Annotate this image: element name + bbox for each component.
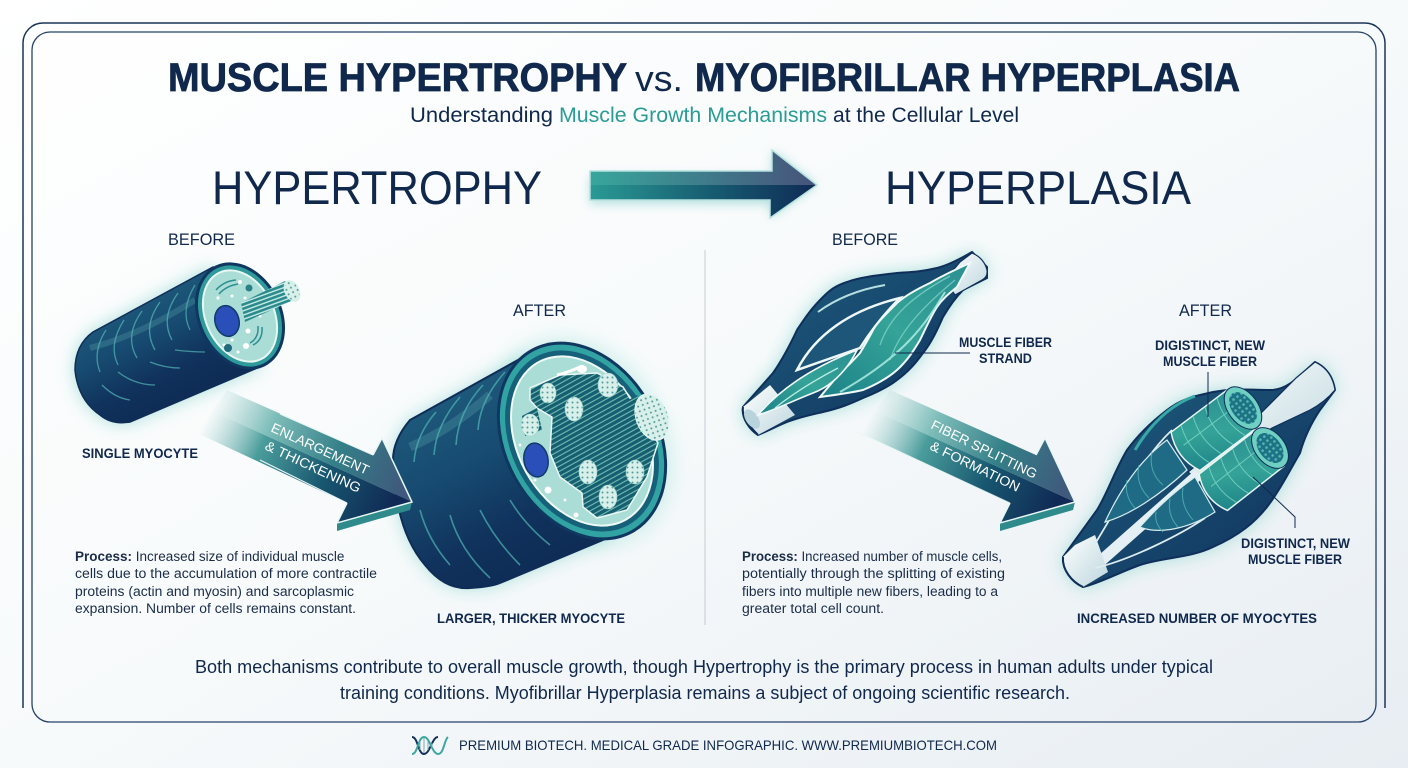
label: before right: BEFORE (832, 230, 898, 249)
label: new fiber lower: DIGISTINCT, NEW (1241, 535, 1351, 551)
tendon strip (1082, 470, 1203, 578)
tendon top (1188, 362, 1335, 478)
fiber 1 (1166, 380, 1269, 474)
title: MYOFIBRILLAR HYPERPLASIA (695, 56, 1240, 100)
label: larger thicker myocyte: LARGER, THICKER MYOCYTE (437, 610, 625, 626)
title: MUSCLE HYPERTROPHY (168, 56, 627, 100)
label: muscle fiber strand: STRAND (979, 350, 1032, 366)
illustration: larger thicker myocyte (393, 304, 709, 588)
subtitle: at the Cellular Level (833, 104, 1019, 127)
highlight (818, 285, 885, 312)
title (168, 56, 1240, 100)
arrow: hypertrophy to hyperplasia (590, 150, 817, 218)
text: hypertrophy process: expansion. Number of cells remains constant. (75, 601, 356, 616)
heading: hyperplasia: HYPERPLASIA (885, 161, 1192, 214)
arrow: enlargement and thickening: & THICKENING (263, 438, 363, 496)
leader (895, 352, 970, 354)
label: muscle fiber strand: MUSCLE FIBER (959, 334, 1052, 350)
fiber 1 dark part (1105, 440, 1187, 522)
label: increased number of myocytes: INCREASED NUMBER OF MYOCYTES (1077, 610, 1317, 626)
heading: hypertrophy: HYPERTROPHY (212, 161, 542, 214)
nucleus (211, 303, 243, 339)
leaders (1207, 372, 1209, 417)
tendon bottom (1063, 535, 1108, 587)
conclusion text: Both mechanisms contribute to overall muscle growth, though Hypertrophy is the primary process in human adults under typical (195, 657, 1213, 677)
subtitle: Understanding (410, 104, 553, 127)
label: after left: AFTER (513, 301, 566, 320)
illustration: muscle after (1063, 362, 1335, 587)
arrow: fiber splitting and formation (855, 390, 1075, 531)
label: new fiber lower (1241, 535, 1351, 567)
nucleus (521, 441, 551, 479)
tendons (945, 253, 987, 295)
text: hyperplasia process (742, 549, 1005, 616)
divider (704, 250, 706, 625)
text: hyperplasia process: fibers into multiple new fibers, leading to a (742, 584, 998, 599)
subtitle (410, 104, 1019, 127)
icon: dna (412, 737, 448, 754)
illustration: single myocyte (75, 247, 303, 423)
label: new fiber lower: MUSCLE FIBER (1248, 551, 1342, 567)
arrow: fiber splitting and formation: & FORMATION (928, 438, 1022, 495)
bundle cavity (530, 373, 658, 518)
text: hyperplasia process: Process: Increased number of muscle cells, (742, 549, 1002, 564)
arrow: enlargement and thickening: ENLARGEMENT (269, 420, 371, 478)
small strand (758, 350, 857, 415)
conclusion text: training conditions. Myofibrillar Hyperplasia remains a subject of ongoing scientific research. (340, 683, 1070, 703)
fiber 2 (1194, 421, 1296, 514)
label: new fiber upper: MUSCLE FIBER (1163, 353, 1257, 369)
text: hypertrophy process: Process: Increased size of individual muscle (75, 549, 344, 564)
text: hyperplasia process: greater total cell count. (742, 601, 884, 616)
text: hypertrophy process (75, 549, 377, 616)
footer text: PREMIUM BIOTECH. MEDICAL GRADE INFOGRAPHIC. WWW.PREMIUMBIOTECH.COM (459, 737, 997, 753)
label: single myocyte: SINGLE MYOCYTE (82, 445, 198, 461)
text: hypertrophy process: proteins (actin and myosin) and sarcoplasmic (75, 584, 354, 599)
illustration: muscle before (741, 252, 987, 435)
fiber 2 dark part (1140, 477, 1215, 530)
label: new fiber upper: DIGISTINCT, NEW (1155, 337, 1266, 353)
middle strand (797, 298, 900, 370)
title: vs. (635, 58, 683, 99)
label: new fiber upper (1155, 337, 1266, 369)
label: after right: AFTER (1179, 301, 1232, 320)
main strand (820, 263, 970, 397)
label: muscle fiber strand (959, 334, 1052, 366)
subtitle: Muscle Growth Mechanisms (559, 104, 827, 127)
arrow: fiber splitting and formation: FIBER SPLITTING (929, 417, 1040, 482)
conclusion text (195, 657, 1213, 703)
text: hypertrophy process: cells due to the accumulation of more contractile (75, 566, 377, 581)
label: before left: BEFORE (168, 230, 235, 249)
text: hyperplasia process: potentially through the splitting of existing (742, 566, 1005, 581)
arrow: enlargement and thickening (197, 390, 412, 531)
